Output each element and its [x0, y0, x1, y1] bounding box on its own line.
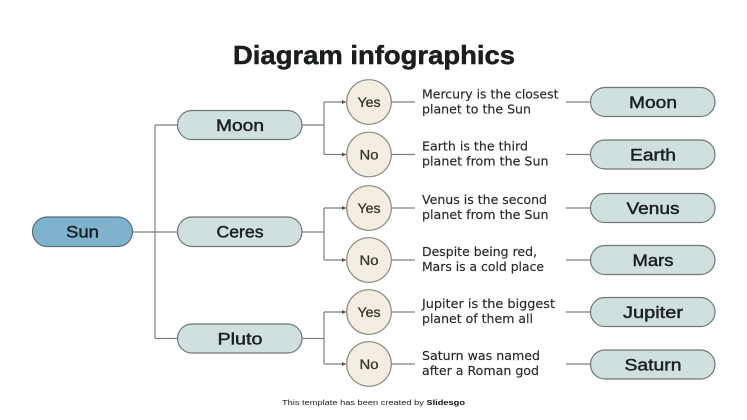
result node: Jupiter: Jupiter — [623, 304, 684, 322]
branch node: Ceres — [178, 217, 302, 246]
answer: No (Ceres) — [347, 238, 391, 282]
result node: Venus — [590, 194, 715, 222]
result node: Moon — [590, 88, 715, 116]
connectors: answers to descriptions and results — [391, 102, 590, 364]
result node: Venus: Venus — [626, 200, 680, 218]
description: Earth — [422, 138, 548, 168]
answer: No (Pluto) — [347, 342, 391, 386]
result node: Mars — [590, 246, 715, 274]
answer: Yes (Pluto) — [347, 290, 391, 334]
description: Mercury — [422, 86, 559, 116]
result node: Saturn — [590, 350, 715, 379]
description: Mercury: Mercury is the closest — [422, 86, 559, 102]
connectors: sun to branches — [133, 125, 177, 338]
description: Earth: Earth is the third — [422, 138, 528, 154]
description: Saturn: after a Roman god — [422, 363, 539, 378]
answer: Yes (Ceres): Yes — [358, 200, 380, 216]
answer: No (Moon) — [347, 132, 391, 177]
branch node: Ceres: Ceres — [216, 224, 264, 242]
result node: Earth — [590, 140, 715, 169]
description: Venus — [422, 192, 548, 222]
description: Jupiter: Jupiter is the biggest — [421, 296, 555, 311]
branch node: Pluto — [178, 324, 302, 353]
result node: Earth: Earth — [630, 146, 676, 164]
description: Saturn — [422, 348, 540, 378]
description: Jupiter — [421, 296, 555, 326]
answer: No (Ceres): No — [360, 252, 379, 268]
answer: Yes (Moon): Yes — [358, 94, 380, 110]
footer credit: This template has been created by Slidesgo — [282, 398, 466, 407]
branch node: Moon — [178, 110, 302, 140]
answer: No (Pluto): No — [360, 356, 379, 372]
description: Saturn: Saturn was named — [422, 348, 540, 363]
description: Venus: planet from the Sun — [422, 207, 548, 222]
result node: Saturn: Saturn — [624, 356, 682, 374]
description: Mercury: planet to the Sun — [422, 102, 531, 116]
root node: Sun: Sun — [66, 224, 99, 242]
answer: No (Moon): No — [360, 146, 379, 162]
description: Mars: Despite being red, — [422, 244, 537, 259]
description: Jupiter: planet of them all — [422, 311, 533, 326]
description: Mars — [422, 244, 544, 274]
root node: Sun — [32, 217, 132, 246]
answer: Yes (Moon) — [347, 80, 391, 124]
result node: Moon: Moon — [629, 94, 677, 112]
title: Diagram infographics — [233, 40, 515, 70]
branch node: Pluto: Pluto — [218, 330, 262, 348]
result node: Jupiter — [590, 298, 715, 326]
description: Earth: planet from the Sun — [422, 154, 548, 168]
result node: Mars: Mars — [632, 252, 674, 270]
answer: Yes (Ceres) — [347, 186, 391, 230]
connectors: branches to answers — [302, 100, 346, 366]
description: Mars: Mars is a cold place — [422, 259, 544, 274]
answer: Yes (Pluto): Yes — [358, 304, 380, 320]
branch node: Moon: Moon — [216, 117, 264, 135]
description: Venus: Venus is the second — [422, 192, 547, 207]
